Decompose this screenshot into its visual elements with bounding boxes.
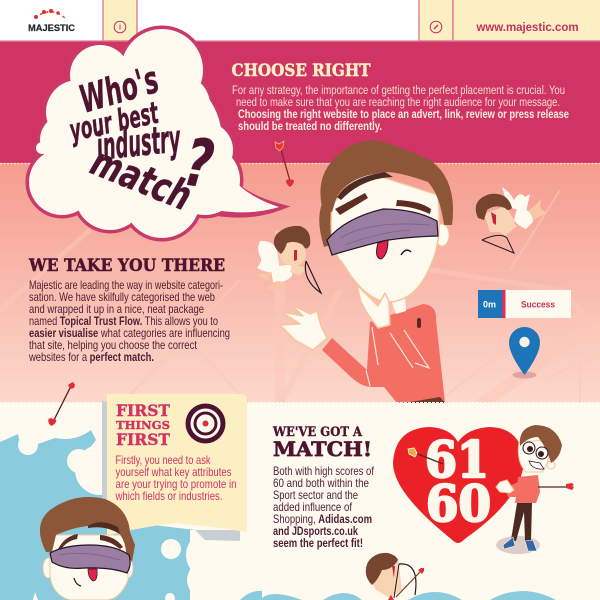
- hair: [320, 140, 453, 225]
- panel: top header bar: [0, 0, 600, 41]
- speech bubble cloud: [29, 29, 279, 238]
- cupid: left: [257, 226, 321, 293]
- heading: we've got a match: WE'VE GOT A: [272, 425, 363, 440]
- hand-lettered title: [66, 57, 218, 220]
- body: coral shirt: [322, 304, 445, 403]
- arrow: falling arrow left: [47, 382, 75, 427]
- icon: info: [114, 21, 126, 33]
- panel: blue sky with clouds: [0, 430, 556, 600]
- hand open: [280, 305, 327, 350]
- collar: [391, 298, 406, 314]
- success tag: [478, 290, 571, 318]
- head: [331, 170, 439, 302]
- text block: we take you there: Majestic are leading the way in website categori-: [29, 278, 223, 292]
- heading: first things first: [116, 401, 170, 449]
- text block: match description: Sport sector and the: [273, 488, 358, 502]
- heart with scores: [393, 427, 524, 543]
- text block: we take you there: named Topical Trust Flow. This allows you to: [29, 314, 218, 328]
- success tag: Success: [521, 300, 555, 310]
- logo: Majestic: MAJESTIC: [28, 23, 75, 34]
- hand-lettered title: industry: [94, 116, 184, 169]
- text block: we take you there: sation. We have skilfully categorised the web: [29, 290, 215, 304]
- hand on chin: [357, 285, 390, 328]
- text block: first things first: yourself what key attributes: [116, 465, 232, 479]
- character: blindfolded man: [280, 140, 453, 404]
- smile: [401, 250, 411, 255]
- heart with scores: 60: [426, 474, 491, 533]
- icon: compass: [430, 21, 442, 33]
- text block: match description: Shopping, Adidas.com: [273, 512, 372, 526]
- panel: bottom cream section: [0, 403, 600, 600]
- text block: first things first: Firstly, you need to ask: [116, 453, 211, 467]
- text block: choose right body: should be treated no differently.: [238, 119, 382, 133]
- character: blindfolded man lower: [33, 497, 135, 600]
- icon: map pin: [509, 327, 540, 378]
- text block: we take you there: easier visualise what categories are influencing: [29, 326, 230, 340]
- text block: match description: Both with high scores of: [273, 464, 375, 478]
- text block: match description: seem the perfect fit!: [273, 536, 363, 550]
- text block: first things first: [115, 453, 236, 503]
- panel: salmon map background: [0, 163, 600, 405]
- heading: we've got a match: MATCH!: [273, 437, 372, 461]
- heading: first things first: THINGS: [116, 418, 170, 432]
- heading: first things first: FIRST: [116, 401, 170, 420]
- text block: match description: 60 and both within the: [273, 476, 369, 490]
- logo: Majestic: [28, 9, 75, 34]
- text block: we take you there: [28, 278, 230, 364]
- text block: choose right body: [232, 83, 569, 133]
- text block: we take you there: websites for a perfect match.: [28, 350, 154, 364]
- website url: www.majestic.com: [476, 20, 578, 34]
- icon: target: [186, 404, 226, 444]
- ear: [435, 224, 449, 246]
- arrow in heart: [408, 448, 443, 464]
- eyebrows: [335, 193, 431, 215]
- heading: first things first: FIRST: [116, 430, 170, 449]
- text block: we take you there: that site, helping you choose the correct: [29, 338, 198, 352]
- back hair: [319, 195, 345, 247]
- tongue: [377, 240, 388, 259]
- panel: first things first note: [98, 394, 247, 541]
- heart with scores: 61: [425, 430, 489, 489]
- text block: first things first: are your trying to promote in: [116, 477, 236, 491]
- text block: first things first: which fields or industries.: [115, 489, 222, 503]
- arrow: falling arrow top: [275, 141, 294, 187]
- text block: match description: added influence of: [273, 500, 353, 514]
- text block: match description: and JDsports.co.uk: [273, 524, 358, 538]
- hand-lettered title: Who's: [74, 57, 163, 122]
- hand-lettered title: your best: [66, 96, 163, 149]
- panel: choose right band: [0, 41, 600, 164]
- heading: we take you there: WE TAKE YOU THERE: [28, 256, 225, 275]
- hand-lettered title: ?: [180, 124, 218, 204]
- text block: match description: [273, 464, 375, 550]
- heading: we've got a match: [272, 425, 372, 461]
- heading: choose right: CHOOSE RIGHT: [232, 61, 371, 80]
- blindfold: [327, 209, 438, 255]
- hand-lettered title: match: [84, 139, 198, 220]
- pen: [417, 318, 421, 328]
- belt: [398, 397, 446, 404]
- cupid: right: [476, 187, 546, 253]
- text block: we take you there: and wrapped it up in a nice, neat package: [29, 302, 204, 316]
- character: man hugging heart: [496, 425, 574, 554]
- cupid: bottom: [360, 553, 424, 600]
- success tag: 0m: [483, 300, 496, 310]
